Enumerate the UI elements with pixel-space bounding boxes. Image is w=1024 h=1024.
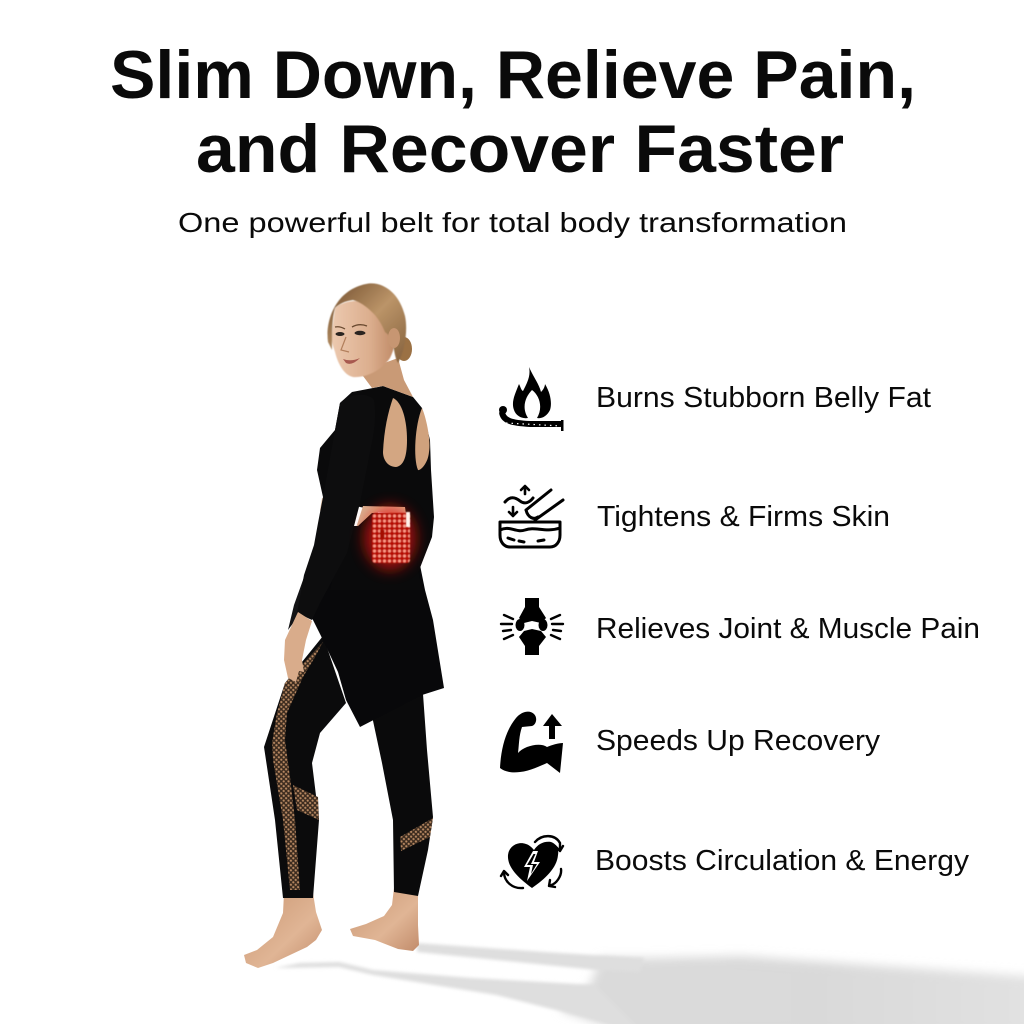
item: joint pain (501, 598, 980, 655)
floor shadow (275, 943, 1024, 1024)
back cutout right (415, 408, 430, 470)
front midriff skin (320, 498, 328, 524)
midriff skin (356, 506, 406, 530)
arm (297, 395, 375, 620)
hand (284, 612, 312, 682)
icon: heart, bolt and cycle arrows (501, 836, 563, 888)
nose (341, 337, 349, 352)
skirt wrap (312, 548, 444, 727)
skirt left tail (288, 555, 312, 630)
item: tightens skin (500, 486, 890, 547)
ear (388, 328, 400, 348)
label: Relieves Joint & Muscle Pain (596, 613, 980, 645)
icon: knee joint (501, 598, 563, 655)
title: Slim Down, Relieve Pain, (110, 37, 916, 113)
waist band (330, 513, 422, 590)
label: Burns Stubborn Belly Fat (596, 382, 931, 414)
hair bun (396, 337, 412, 361)
face (331, 301, 396, 377)
hair (328, 283, 406, 363)
belt LED panel (372, 513, 410, 563)
front leg (264, 636, 346, 898)
title: and Recover Faster (196, 111, 844, 187)
item: burns belly fat (499, 367, 931, 431)
torso top (317, 386, 434, 573)
front foot (244, 893, 322, 968)
label: Tightens & Firms Skin (597, 501, 890, 533)
eyebrows (335, 325, 367, 329)
mouth (343, 358, 360, 364)
back leg (372, 680, 433, 896)
icon: flame and tape measure (499, 367, 564, 431)
subtitle: One powerful belt for total body transformation (178, 207, 847, 238)
title (110, 37, 916, 187)
red glow (364, 506, 416, 570)
back leg mesh panel (400, 818, 433, 851)
front knee mesh panel (293, 785, 319, 820)
item: circulation (501, 836, 970, 888)
item: recovery (500, 712, 881, 773)
figure: woman wearing red light belt (244, 283, 444, 968)
front leg mesh panel (272, 642, 323, 890)
icon: skin layers and finger (500, 486, 563, 547)
label: Boosts Circulation & Energy (595, 845, 970, 877)
eyes (336, 331, 366, 336)
label: Speeds Up Recovery (596, 725, 881, 757)
belt highlight (406, 512, 410, 527)
icon: flexed arm with arrow (500, 712, 563, 773)
neck (360, 358, 413, 397)
back cutout left (383, 398, 407, 467)
back foot (350, 888, 419, 951)
